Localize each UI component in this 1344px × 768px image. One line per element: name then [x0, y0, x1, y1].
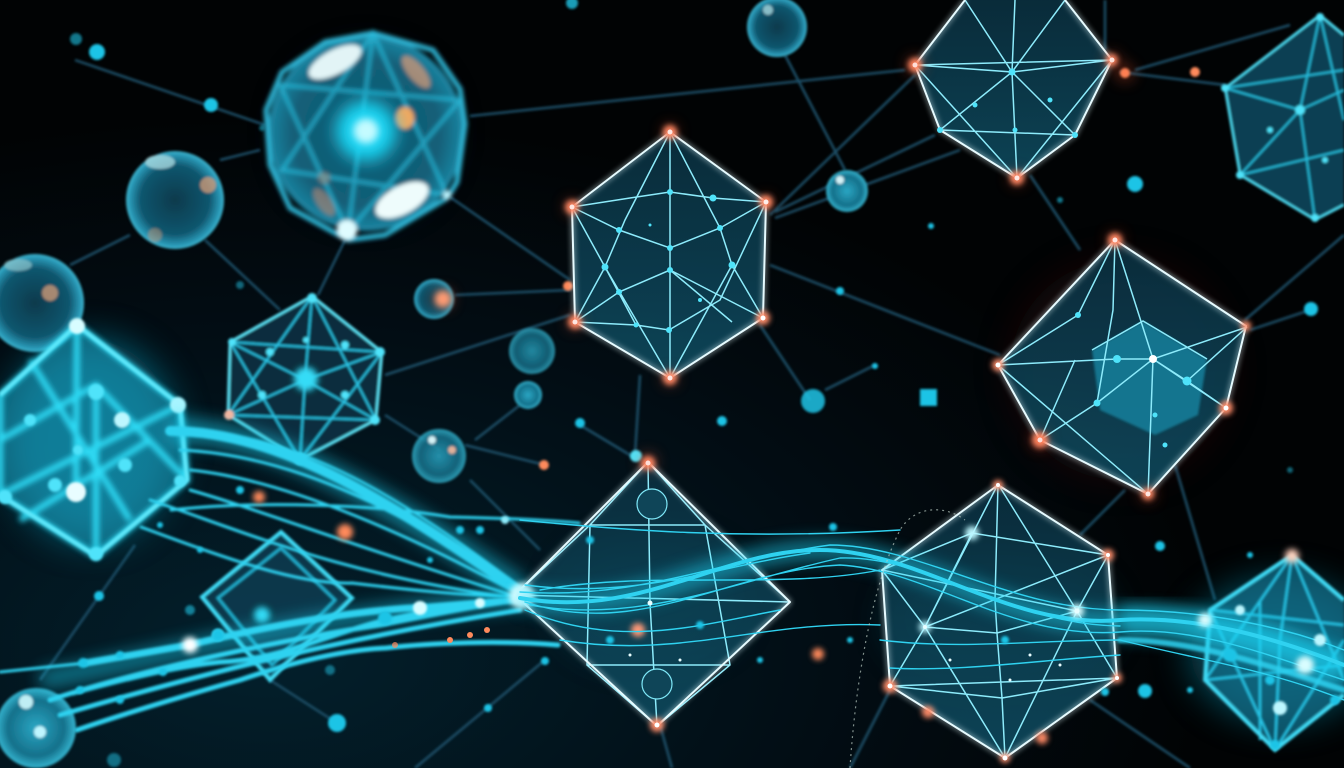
sparkles along the streams: [76, 486, 1340, 750]
polyhedron: right middle with inner crystal: [992, 233, 1251, 500]
warm corner glows on vertices: [435, 54, 1154, 500]
large faceted sphere: [266, 33, 465, 240]
polyhedron: top centre hexagon: [565, 125, 773, 385]
light stream: upper left swoosh: [141, 430, 579, 597]
polyhedron: lower right: [882, 480, 1122, 763]
polyhedron: lower centre diamond: [509, 456, 790, 732]
polyhedron: lower left diamond: [202, 532, 352, 680]
polyhedron: top right: [908, 0, 1118, 185]
light stream: lower left bundle: [0, 600, 558, 730]
polyhedron: large glowing left: [0, 318, 187, 561]
glass spheres: [0, 0, 868, 768]
polyhedron: far right top: [1221, 13, 1344, 222]
polyhedron: far right bottom: [1205, 549, 1344, 750]
light stream: centre to right: [520, 510, 1344, 768]
polyhedron: left middle: [224, 293, 385, 465]
